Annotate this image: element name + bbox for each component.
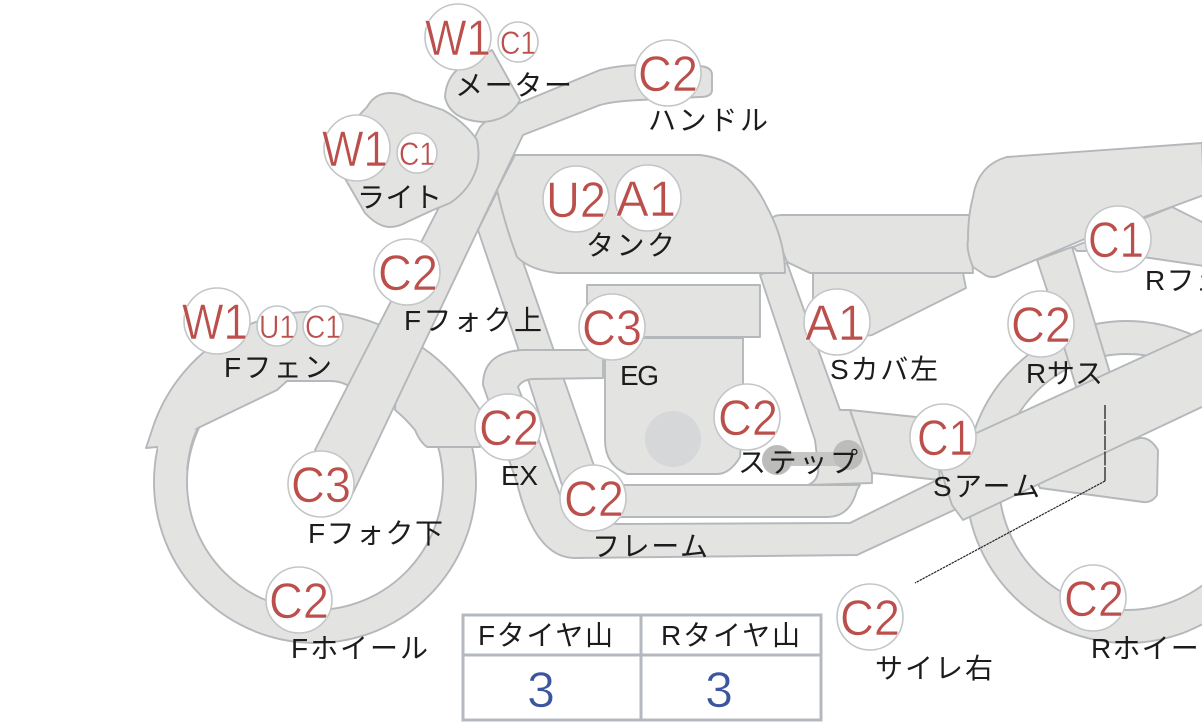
headlight: [340, 93, 478, 227]
badge: front wheel C2: C2: [269, 573, 329, 629]
label: step: ステップ: [738, 447, 858, 478]
badge: side cover A1: A1: [805, 295, 865, 351]
label: fork lower: Fフォク下: [308, 518, 443, 549]
label: light: ライト: [357, 182, 442, 213]
front fork and handlebar: [315, 65, 712, 493]
badge: meter W1: W1: [425, 10, 491, 66]
rear suspension: [1037, 247, 1110, 390]
label: tank: タンク: [586, 230, 675, 261]
badge: rear wheel C2: C2: [1064, 571, 1124, 627]
badge: exhaust C2: C2: [479, 400, 539, 456]
label: fork upper: Fフォク上: [404, 305, 542, 336]
label: engine: EG: [620, 360, 659, 391]
label: exhaust: EX: [501, 460, 538, 491]
downtube: [478, 190, 610, 510]
label: meter: メーター: [455, 70, 572, 101]
badge: swing arm C1: C1: [917, 410, 973, 466]
label: rear suspension: Rサス: [1026, 358, 1103, 389]
rear wheel: [966, 321, 1202, 643]
swing arm front: [850, 410, 940, 480]
label: handle: ハンドル: [648, 105, 768, 136]
tire tread table: [463, 615, 821, 720]
seat: [772, 215, 973, 273]
label: frame: フレーム: [592, 531, 708, 562]
badge: fender C1: C1: [305, 309, 341, 345]
rear fender stay: [1073, 207, 1202, 266]
badge: step C2: C2: [718, 390, 778, 446]
badge: meter C1: C1: [500, 25, 536, 61]
motorcycle body: [146, 50, 1202, 643]
lower frame tube: [590, 485, 860, 517]
step bar: [762, 440, 863, 475]
fender and wheel join: [158, 428, 198, 470]
engine head: [587, 285, 760, 337]
front wheel: [154, 321, 476, 643]
header: front tire tread: Fタイヤ山: [478, 620, 613, 651]
muffler band: [935, 329, 1202, 520]
badge: frame C2: C2: [564, 471, 624, 527]
value: rear tire tread: 3: [705, 662, 733, 718]
badge: engine C3: C3: [582, 300, 642, 356]
swing arm rear end: [1030, 438, 1158, 502]
fuel tank: [497, 155, 785, 273]
engine disk: [645, 411, 701, 467]
exhaust pipe and lower frame: [483, 350, 965, 558]
header: rear tire tread: Rタイヤ山: [661, 620, 800, 651]
badge: handle C2: C2: [638, 46, 698, 102]
rear frame: [760, 263, 872, 485]
side cover: [813, 273, 966, 345]
badge: fender W1: W1: [182, 294, 248, 350]
dashed leader line: [915, 405, 1105, 583]
badge: fork lower C3: C3: [291, 457, 351, 513]
badge: light C1: C1: [399, 136, 435, 172]
badge: light W1: W1: [322, 121, 388, 177]
badge: fork upper C2: C2: [378, 245, 438, 301]
badge: tank A1: A1: [616, 171, 676, 227]
badge: fender U1: U1: [259, 309, 295, 345]
front fender right: [395, 335, 480, 447]
badge: tank U2: U2: [546, 172, 606, 228]
label: front fender: Fフェン: [224, 352, 332, 383]
badge: silencer C2: C2: [840, 590, 900, 646]
label: swing arm: Sアーム: [933, 471, 1040, 502]
tail cowl: [968, 143, 1202, 277]
label: side cover left: Sカバ左: [830, 354, 938, 385]
label: front wheel: Fホイール: [291, 633, 428, 664]
label: silencer right: サイレ右: [875, 653, 993, 684]
value: front tire tread: 3: [527, 662, 555, 718]
engine crankcase: [605, 338, 743, 474]
badge: rear suspension C2: C2: [1011, 297, 1071, 353]
badge: rear fender C1: C1: [1088, 212, 1144, 268]
front fender left: [146, 312, 380, 448]
meter: [445, 50, 520, 122]
